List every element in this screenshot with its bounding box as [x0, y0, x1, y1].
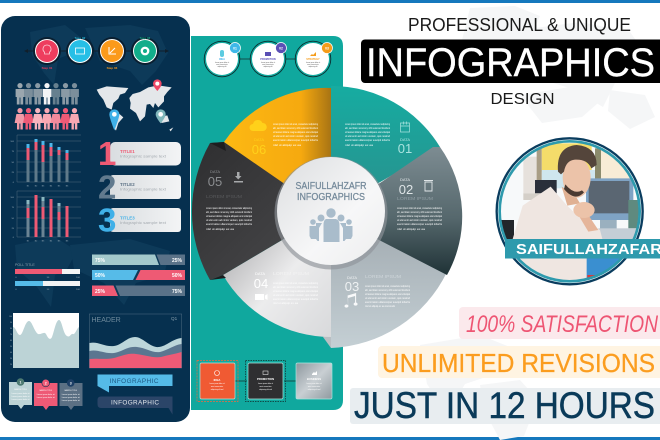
- process circle 1: IDEA: [219, 58, 225, 61]
- wedge 03: exerci tation ullamcorper suscipit lobortis: [365, 300, 411, 304]
- wedge 06: elit, sed diam nonummy nibh euismod tincidunt: [273, 126, 318, 130]
- wedge 03: [323, 211, 447, 348]
- icon: step 02 mail: [66, 37, 94, 65]
- bar chart 1: [10, 135, 81, 188]
- bar chart 2: 100: [10, 197, 15, 199]
- area chart: 30: [10, 358, 12, 360]
- process circle 1: 01: [233, 46, 237, 50]
- note card 2: SAMPLE TITLE: [39, 389, 53, 392]
- title card 3: TITLE3: [120, 216, 135, 220]
- wedge 01: elit, sed diam nonummy nibh euismod tincidunt: [345, 126, 390, 130]
- percentage bars: 50%: [172, 273, 183, 279]
- step labels: Step 03: [107, 66, 118, 70]
- bar chart 1: 50: [12, 162, 15, 164]
- process circle 2: Lorem ipsum dolor sit: [261, 61, 276, 64]
- area chart: 80: [10, 328, 12, 330]
- faint world map on dark panel: [15, 25, 170, 307]
- portrait photo: [502, 143, 638, 280]
- wedge 03: DATA: [347, 275, 357, 280]
- area chart: 90: [10, 322, 12, 324]
- bar chart 2: B3: [42, 240, 45, 242]
- icon: download: [234, 172, 243, 182]
- wedge 01: 01: [398, 141, 412, 156]
- percentage bars: 75%: [172, 289, 183, 295]
- note card 1: Lorem ipsum dolor sit: [12, 398, 30, 401]
- title card 3: 3: [98, 202, 116, 238]
- wedge 04: ut wisi enim ad minim veniam, quis nostrud: [273, 293, 318, 297]
- wedge 04: exerci tation ullamcorper suscipit lobortis: [273, 297, 319, 301]
- process circle 1: adipiscing elit: [217, 65, 227, 68]
- area chart: 50: [10, 346, 12, 348]
- header wave chart: [89, 314, 182, 368]
- step connector line: [24, 49, 169, 53]
- wedge 03: ut laoreet dolore magna aliquam erat volutpat: [365, 292, 410, 296]
- wedge 03: 03: [345, 279, 359, 294]
- square business: [296, 363, 332, 399]
- poll bars: 0: [15, 289, 17, 291]
- bar chart 1: 100: [10, 141, 15, 143]
- ribbon: blue infographic: [98, 374, 172, 392]
- top blue bar: [0, 0, 660, 3]
- wedge 06: Lorem ipsum dolor sit amet, consectetur adipiscing: [273, 122, 318, 126]
- note card 3: 3: [70, 382, 72, 386]
- bar chart 2: 50: [12, 218, 15, 220]
- wedge 05: 05: [208, 174, 222, 189]
- world map with pins: [97, 79, 173, 131]
- note card 2: Lorem ipsum dolor sit: [37, 396, 55, 399]
- wedge 02: elit, sed diam nonummy nibh euismod tincidunt: [397, 210, 442, 214]
- poll bars: 0: [15, 277, 17, 279]
- icon: trash: [424, 180, 433, 191]
- wedge 02: nisl ut aliquip ex ea: [397, 227, 426, 231]
- poll bars: 50: [47, 277, 50, 279]
- wedge 06: nisl ut aliquip ex ea: [273, 143, 302, 147]
- icon: group of people: [310, 208, 352, 242]
- area chart: [9, 313, 79, 368]
- bar chart 2: 0: [13, 237, 15, 239]
- percentage bars: 75%: [95, 258, 106, 264]
- poll bars: 100: [76, 289, 81, 291]
- icon: cloud: [250, 120, 267, 131]
- title card 2: [98, 168, 181, 206]
- title card 1: Infographic sample text: [120, 154, 166, 158]
- map pin: teal: [156, 109, 166, 123]
- note card 2: [34, 379, 58, 410]
- people pictogram: men: [16, 83, 79, 104]
- process circle 2: 02: [279, 46, 283, 50]
- process circle 3: amet consectetur: [307, 63, 319, 66]
- header wave chart: Q1: [171, 316, 178, 321]
- wedge 05: ut wisi enim ad minim veniam, quis nostrud: [206, 218, 253, 222]
- wedge 06: exerci tation ullamcorper suscipit lobortis: [273, 138, 319, 142]
- area chart: 70: [10, 334, 12, 336]
- note card 2: Lorem ipsum dolor sit: [37, 393, 55, 396]
- bar chart 2: B4: [50, 240, 53, 242]
- square promotion: [246, 360, 286, 402]
- wedge 04: Lorem ipsum dolor sit amet, consectetur adipiscing: [273, 281, 318, 285]
- wedge 04: elit, sed diam nonummy nibh euismod tincidunt: [273, 285, 318, 289]
- wedge 06: DATA: [254, 137, 264, 142]
- process circle 2: adipiscing elit: [263, 65, 273, 68]
- process circle 3: 03: [325, 46, 329, 50]
- title card 2: TITLE2: [120, 182, 135, 187]
- process circle 2: amet consectetur: [262, 63, 274, 66]
- step labels: [42, 36, 151, 70]
- wedge 06: ut wisi enim ad minim veniam, quis nostrud: [273, 134, 318, 138]
- wedge 01: Lorem ipsum dolor sit amet, consectetur adipiscing: [345, 122, 390, 126]
- note card 3: Lorem ipsum dolor sit: [62, 399, 80, 402]
- note card 1: 1: [20, 380, 22, 384]
- bar chart 1: 0: [13, 182, 15, 184]
- bar chart 1: B5: [58, 186, 61, 188]
- bar chart 1: B3: [42, 186, 45, 188]
- wedge 04: LOREM IPSUM: [273, 271, 309, 276]
- note card 2: 2: [45, 382, 47, 386]
- area chart: 100: [9, 316, 12, 318]
- heading: professional and unique: PROFESSIONAL & UNIQUE: [408, 14, 631, 35]
- bar chart 2: 75: [12, 207, 15, 209]
- process circle 2: [250, 41, 286, 77]
- bar chart 1: 75: [12, 151, 15, 153]
- wedge 01: DATA: [400, 137, 410, 142]
- wedge 06: 06: [252, 142, 266, 157]
- wedge 01: ut wisi enim ad minim veniam, quis nostrud: [345, 134, 390, 138]
- title card 3: Infographic sample text: [120, 221, 166, 225]
- square promotion: amet consectetur: [259, 385, 272, 388]
- process circle 3: adipiscing elit: [308, 65, 318, 68]
- step labels: Step 04: [140, 36, 151, 40]
- icon: music note: [344, 293, 358, 308]
- ribbon: blue infographic: INFOGRAPHIC: [110, 378, 159, 385]
- wedge 05: exerci tation ullamcorper suscipit lobortis: [206, 222, 253, 226]
- process circle 2: PROMOTION: [260, 58, 276, 61]
- bar chart 2: B6: [66, 240, 69, 242]
- icon: step 03 chart: [98, 37, 126, 65]
- process circle 3: [295, 41, 332, 77]
- ribbon: dark infographic: [98, 396, 172, 414]
- poll bars: [15, 263, 81, 291]
- wedge 05: DATA: [210, 169, 220, 174]
- title card 2: Infographic sample text: [120, 188, 166, 192]
- bar chart 1: 25: [12, 172, 15, 174]
- bar chart 1: B6: [66, 186, 69, 188]
- wheel diagram: [192, 86, 462, 348]
- center hub: [274, 156, 388, 270]
- title card 1: 1: [98, 135, 116, 172]
- ribbon: dark infographic: INFOGRAPHIC: [111, 400, 159, 406]
- map pin: red: [153, 79, 162, 91]
- heading: design: DESIGN: [490, 91, 554, 108]
- wedge 02: DATA: [400, 177, 410, 182]
- percentage bars: 50%: [95, 273, 106, 279]
- icon: camera: [255, 294, 268, 300]
- note card 3: Lorem ipsum dolor sit: [62, 393, 80, 396]
- square promotion: Lorem ipsum dolor sit: [258, 382, 274, 385]
- square idea: Lorem ipsum dolor sit: [209, 382, 225, 385]
- wedge 01: exerci tation ullamcorper suscipit lobortis: [345, 138, 391, 142]
- bar chart 1: B2: [35, 186, 38, 188]
- icon: calendar: [400, 122, 410, 132]
- wedge 05: Lorem ipsum dolor sit amet, consectetur adipiscing: [206, 206, 252, 210]
- wedge 02: LOREM IPSUM: [397, 196, 433, 201]
- wedge 04: nisl ut aliquip ex ea: [273, 301, 299, 305]
- note card 1: Lorem ipsum dolor sit: [12, 395, 30, 398]
- wedge 01: ut laoreet dolore magna aliquam erat volutpat: [345, 130, 390, 134]
- header wave chart: HEADER: [92, 317, 121, 324]
- bar chart 1: B4: [50, 186, 53, 188]
- square idea: amet consectetur: [211, 385, 224, 388]
- wedge 03: Lorem ipsum dolor sit amet, consectetur adipiscing: [365, 284, 410, 288]
- wedge 03: nisl ut aliquip ex ea commodo: [365, 304, 395, 308]
- note card 3: [60, 379, 82, 410]
- wedge 03: LOREM IPSUM: [365, 274, 401, 279]
- step labels: Step 02: [75, 36, 86, 40]
- title card 2: 2: [98, 168, 116, 206]
- poll bars: 100: [76, 277, 81, 279]
- bar chart 2: [10, 191, 81, 242]
- wedge 03: elit, sed diam nonummy nibh euismod tincidunt: [365, 288, 410, 292]
- panel: dark dashboard: [1, 16, 190, 422]
- step labels: Step 01: [42, 66, 53, 70]
- title card 3: [98, 202, 181, 238]
- bar chart 2: B1: [27, 240, 30, 242]
- pale world map background: [420, 6, 655, 440]
- process circle 1: amet consectetur: [216, 63, 228, 66]
- center hub: SAIFULLAHZAFR: [296, 180, 367, 192]
- process circle 3: Lorem ipsum dolor sit: [306, 61, 321, 64]
- bottom blue bar: [0, 437, 660, 440]
- wedge 02: Lorem ipsum dolor sit amet, consectetur adipiscing: [397, 206, 442, 210]
- wedge 01: nisl ut aliquip ex ea: [345, 143, 374, 147]
- square idea: IDEA: [214, 378, 220, 382]
- note card 1: SAMPLE TITLE: [14, 388, 28, 391]
- panel: teal wheel background: [191, 36, 343, 410]
- percentage bars: [92, 254, 185, 296]
- note card 3: SAMPLE TITLE: [64, 389, 78, 392]
- wedge 05: nisl ut aliquip ex ea: [206, 227, 235, 231]
- wedge 01: [331, 86, 440, 211]
- square business: Lorem ipsum dolor sit: [306, 382, 322, 385]
- bar chart 2: B5: [58, 240, 61, 242]
- process circle 1: [204, 41, 240, 77]
- square idea: [197, 360, 238, 402]
- wedge 05: [192, 142, 331, 280]
- wedge 06: ut laoreet dolore magna aliquam erat volutpat: [273, 130, 318, 134]
- wedge 04: DATA: [255, 271, 265, 276]
- note card 1: [9, 378, 32, 409]
- percentage bars: 25%: [95, 289, 106, 295]
- square idea: adipiscing elit sed: [211, 388, 223, 391]
- wedge 04: ut laoreet dolore magna aliquam erat volutpat: [273, 289, 318, 293]
- title card 1: TITLE1: [120, 149, 135, 154]
- poll bars: POLL TITLE: [15, 263, 35, 267]
- bar chart 1: B1: [27, 186, 30, 188]
- square business: amet consectetur: [308, 385, 321, 388]
- poll bars: 50: [47, 289, 50, 291]
- wedge 04: 04: [254, 276, 268, 291]
- bar chart 2: 25: [12, 228, 15, 230]
- square business: adipiscing elit sed: [308, 388, 320, 391]
- map pin: blue: [109, 109, 119, 130]
- portrait badge: [497, 138, 660, 285]
- square promotion: adipiscing elit sed: [259, 388, 272, 391]
- wedge 03: ut wisi enim ad minim veniam, quis nostrud: [365, 296, 410, 300]
- wedge 02: 02: [399, 182, 413, 197]
- note card 1: Lorem ipsum dolor sit: [12, 392, 30, 395]
- percentage bars: 25%: [172, 258, 183, 264]
- wedge 04: [223, 211, 331, 337]
- process circles top: [204, 41, 332, 77]
- people pictogram: women: [15, 108, 80, 130]
- bar chart 2: B2: [35, 240, 38, 242]
- wedge 05: elit, sed diam nonummy nibh euismod tincidunt: [206, 210, 252, 214]
- process circle 1: Lorem ipsum dolor sit: [215, 61, 230, 64]
- title card 1: [98, 135, 181, 172]
- wedge 02: ut wisi enim ad minim veniam, quis nostrud: [397, 218, 442, 222]
- icon: step 04 gear: [131, 37, 159, 65]
- wedge 02: exerci tation ullamcorper suscipit lobortis: [397, 222, 443, 226]
- wedge 02: ut laoreet dolore magna aliquam erat volutpat: [397, 214, 442, 218]
- process circle 3: STRATEGY: [306, 58, 320, 61]
- name banner: SAIFULLAHZAFAR: [516, 241, 660, 258]
- process squares bottom: [197, 360, 332, 402]
- wedge 05: ut laoreet dolore magna aliquam erat volutpat: [206, 214, 252, 218]
- area chart: 40: [10, 352, 12, 354]
- center hub: INFOGRAPHICS: [297, 191, 365, 203]
- wedge 05: LOREM IPSUM: [206, 194, 242, 199]
- wedge 06: [224, 88, 331, 216]
- icon: step 01 bulb: [33, 37, 61, 65]
- note card 3: Lorem ipsum dolor sit: [62, 396, 80, 399]
- area chart: 60: [10, 340, 12, 342]
- wedge 02: [331, 147, 462, 275]
- square promotion: PROMOTION: [257, 377, 274, 381]
- square business: BUSINESS: [307, 377, 321, 381]
- area chart: 20: [10, 364, 12, 366]
